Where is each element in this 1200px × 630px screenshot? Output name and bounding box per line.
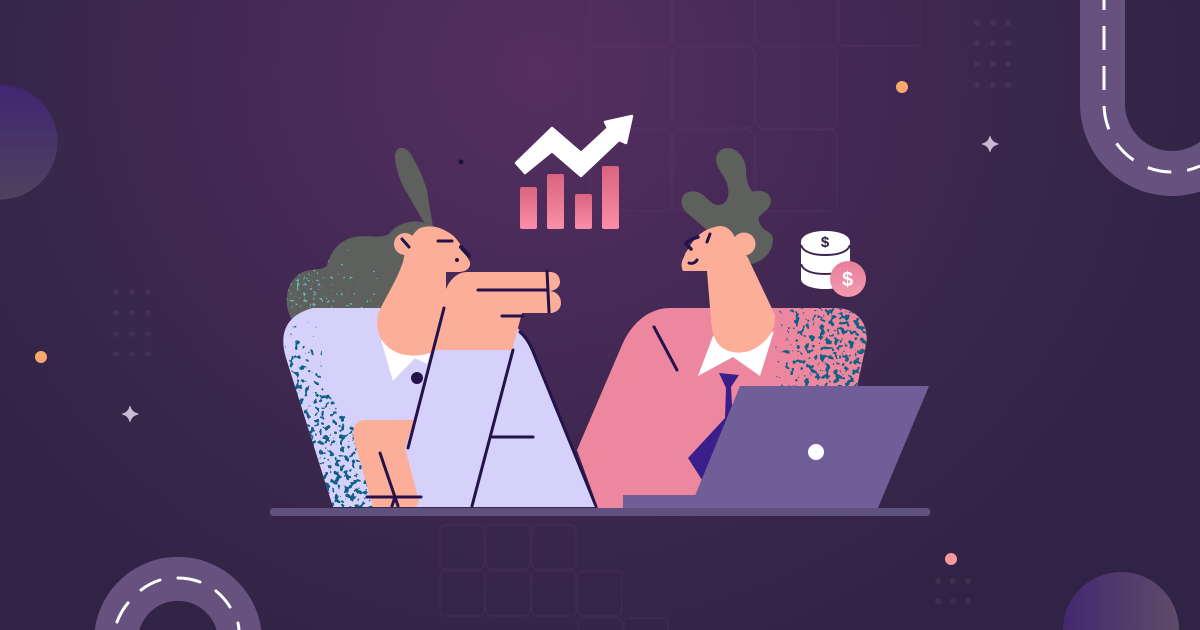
laptop base (623, 495, 700, 508)
background grid: top (590, 0, 921, 211)
jacket button (411, 372, 423, 384)
sleeve line (654, 327, 677, 370)
figure: woman (275, 148, 596, 507)
hair ponytail (395, 148, 433, 226)
figure: man (577, 148, 870, 508)
lower hand (353, 420, 419, 507)
chart bars (520, 166, 619, 229)
icon: growth chart (516, 116, 632, 229)
outline strokes (367, 239, 596, 506)
face details (686, 234, 710, 263)
ear (394, 233, 416, 255)
dot grid: bottom right (935, 578, 971, 604)
dot grid: left (113, 289, 151, 357)
dot grid: top right (974, 20, 1011, 88)
coin stack body (801, 231, 850, 289)
icon: coin stack (801, 231, 866, 297)
decorative circle: bottom right (1063, 572, 1179, 630)
coin stack bands (801, 245, 850, 274)
collar (698, 331, 774, 376)
laptop screen (690, 386, 929, 508)
small dark dot (458, 160, 464, 164)
road: top right (1080, 0, 1200, 196)
sparkle: left (122, 406, 138, 422)
table (270, 508, 930, 516)
laptop logo dot (808, 444, 824, 460)
jacket speckles (285, 322, 372, 507)
ear (732, 232, 756, 256)
shirt speckles (776, 308, 867, 386)
shirt (577, 308, 867, 508)
jacket (283, 308, 596, 507)
head and neck (682, 226, 775, 353)
background grid: bottom (440, 525, 668, 630)
hair (287, 222, 433, 320)
hand and forearm (436, 272, 561, 350)
pink coin (830, 261, 866, 297)
laptop (623, 386, 929, 508)
trend arrow (516, 116, 632, 176)
road: bottom left (95, 557, 261, 630)
accent dot: bottom pink (945, 553, 957, 565)
hair speckles (286, 244, 378, 308)
dollar sign: pink coin: $ (842, 269, 853, 291)
head and neck (377, 226, 470, 356)
decorative circle: left (0, 84, 58, 200)
nostril (455, 258, 459, 262)
accent dot: top orange (896, 81, 908, 93)
accent dot: left orange (35, 351, 47, 363)
collar (381, 340, 432, 381)
tie (688, 373, 760, 480)
dollar sign: stack: $ (821, 234, 830, 251)
hair (682, 148, 773, 264)
sparkle: right (982, 136, 998, 152)
